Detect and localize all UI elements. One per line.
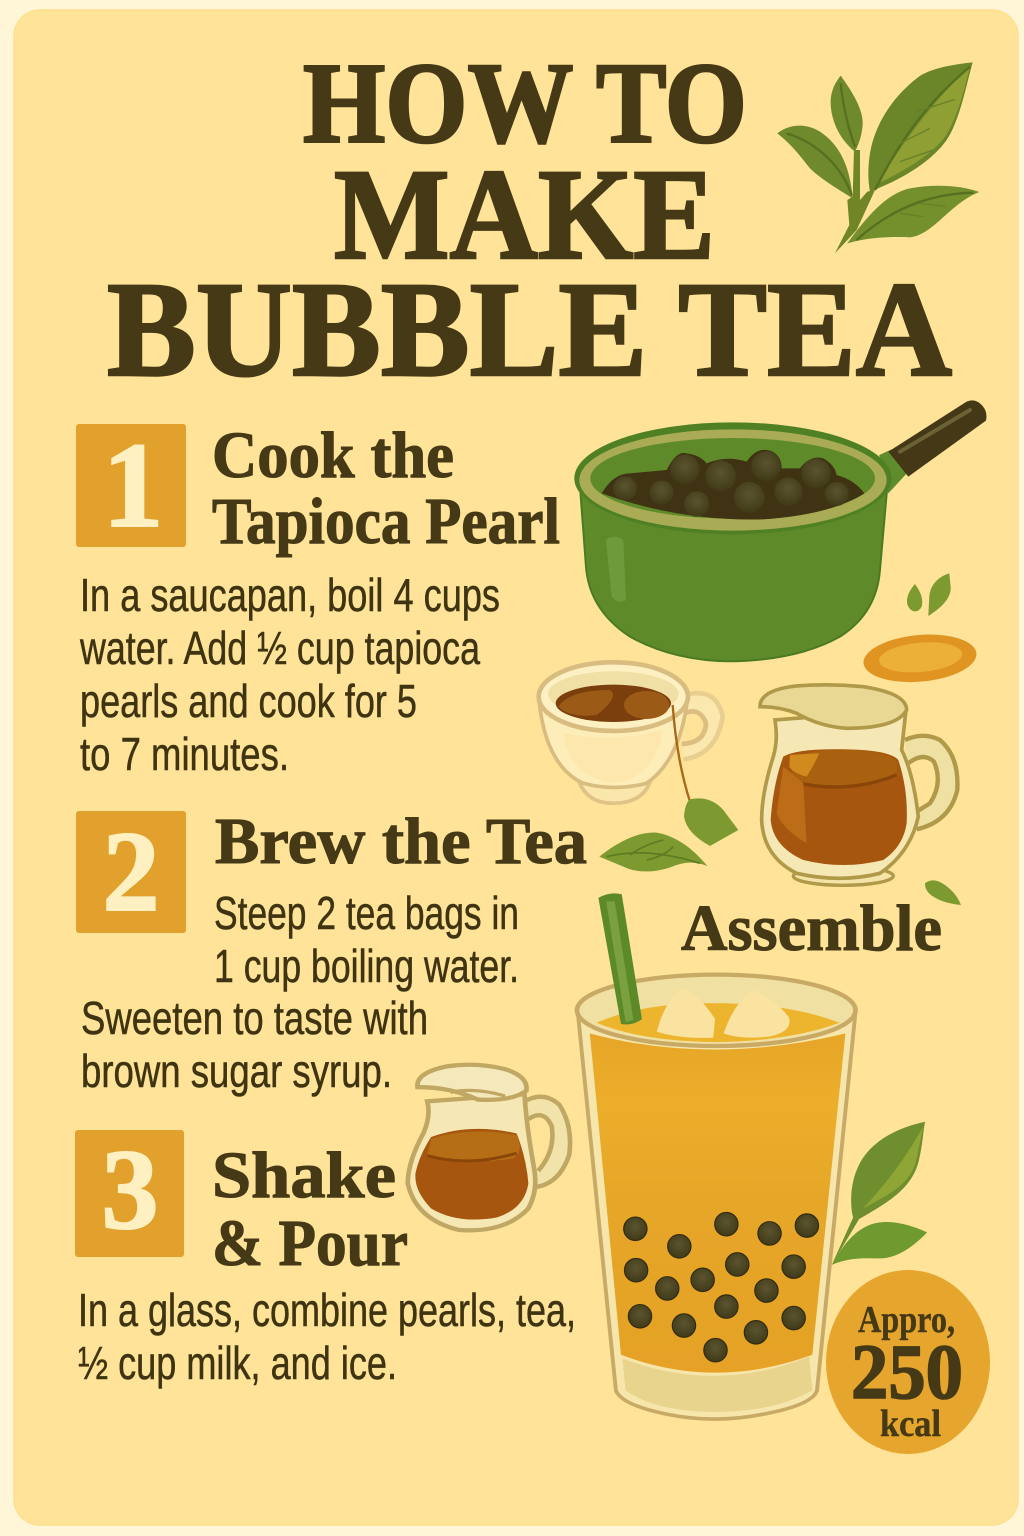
step 2 text: brown sugar syrup. bbox=[81, 1045, 392, 1097]
step 1 text: to 7 minutes. bbox=[80, 728, 289, 780]
step 3 text: In a glass, combine pearls, tea, bbox=[78, 1284, 576, 1336]
icon: tea leaves top right bbox=[777, 62, 979, 253]
step 1 heading bbox=[212, 419, 560, 558]
callout: calorie badge: Appro, bbox=[858, 1299, 955, 1341]
step 2 text bbox=[81, 887, 519, 1097]
step 2 bbox=[76, 805, 587, 1097]
straw bbox=[598, 893, 642, 1025]
step 1 bbox=[76, 418, 560, 780]
step 2 text: 1 cup boiling water. bbox=[214, 940, 519, 992]
step 1 text: In a saucapan, boil 4 cups bbox=[80, 569, 500, 621]
title: BUBBLE TEA bbox=[107, 255, 952, 405]
icon: bubble tea glass bbox=[577, 893, 856, 1419]
step 2 heading: Brew the Tea bbox=[215, 805, 587, 878]
glass body bbox=[578, 1016, 855, 1419]
step 1 text: pearls and cook for 5 bbox=[80, 675, 417, 727]
step 3 heading bbox=[212, 1139, 408, 1280]
icon: leaf beside step 2 bbox=[599, 833, 707, 871]
icon: small leaves and syrup dish bbox=[861, 573, 978, 686]
step 3 number badge bbox=[75, 1126, 184, 1257]
title: MAKE bbox=[334, 143, 715, 287]
icon: leaves beside glass bbox=[832, 1122, 927, 1265]
icon: small leaf above Assemble bbox=[925, 880, 961, 905]
title bbox=[107, 40, 952, 405]
title: HOW TO bbox=[303, 40, 747, 168]
step 1 heading: Tapioca Pearl bbox=[212, 485, 560, 558]
callout: calorie badge: kcal bbox=[880, 1403, 941, 1445]
step 1 text bbox=[79, 569, 500, 780]
step 3 text bbox=[78, 1284, 576, 1389]
ice bbox=[657, 988, 715, 1038]
heading: Assemble: Assemble bbox=[681, 892, 942, 965]
step 2 text: Steep 2 tea bags in bbox=[214, 887, 519, 939]
glass base bbox=[623, 1357, 812, 1412]
step 3 heading: Shake bbox=[212, 1139, 396, 1212]
rim bbox=[577, 975, 856, 1046]
step 1 number badge: 1 bbox=[102, 418, 164, 553]
icon: small syrup pitcher bbox=[408, 1065, 570, 1230]
step 2 number badge: 2 bbox=[102, 808, 160, 935]
step 3 heading: & Pour bbox=[212, 1207, 408, 1280]
step 3 number badge: 3 bbox=[102, 1126, 158, 1253]
step 3 text: ½ cup milk, and ice. bbox=[78, 1337, 397, 1389]
step 3 bbox=[75, 1126, 576, 1389]
icon: saucepan with pearls bbox=[574, 400, 986, 661]
callout: calorie badge: 250 bbox=[851, 1328, 963, 1415]
step 1 number badge bbox=[76, 418, 186, 553]
pearls bbox=[624, 1212, 819, 1362]
step 1 heading: Cook the bbox=[212, 419, 454, 492]
step 2 text: Sweeten to taste with bbox=[81, 992, 428, 1044]
step 2 number badge bbox=[76, 808, 186, 935]
callout: calorie badge bbox=[826, 1270, 990, 1454]
step 1 text: water. Add ½ cup tapioca bbox=[79, 622, 480, 674]
milk tea bbox=[590, 1034, 845, 1373]
icon: teacup with tea bag bbox=[539, 662, 738, 846]
icon: large syrup pitcher bbox=[760, 685, 957, 885]
